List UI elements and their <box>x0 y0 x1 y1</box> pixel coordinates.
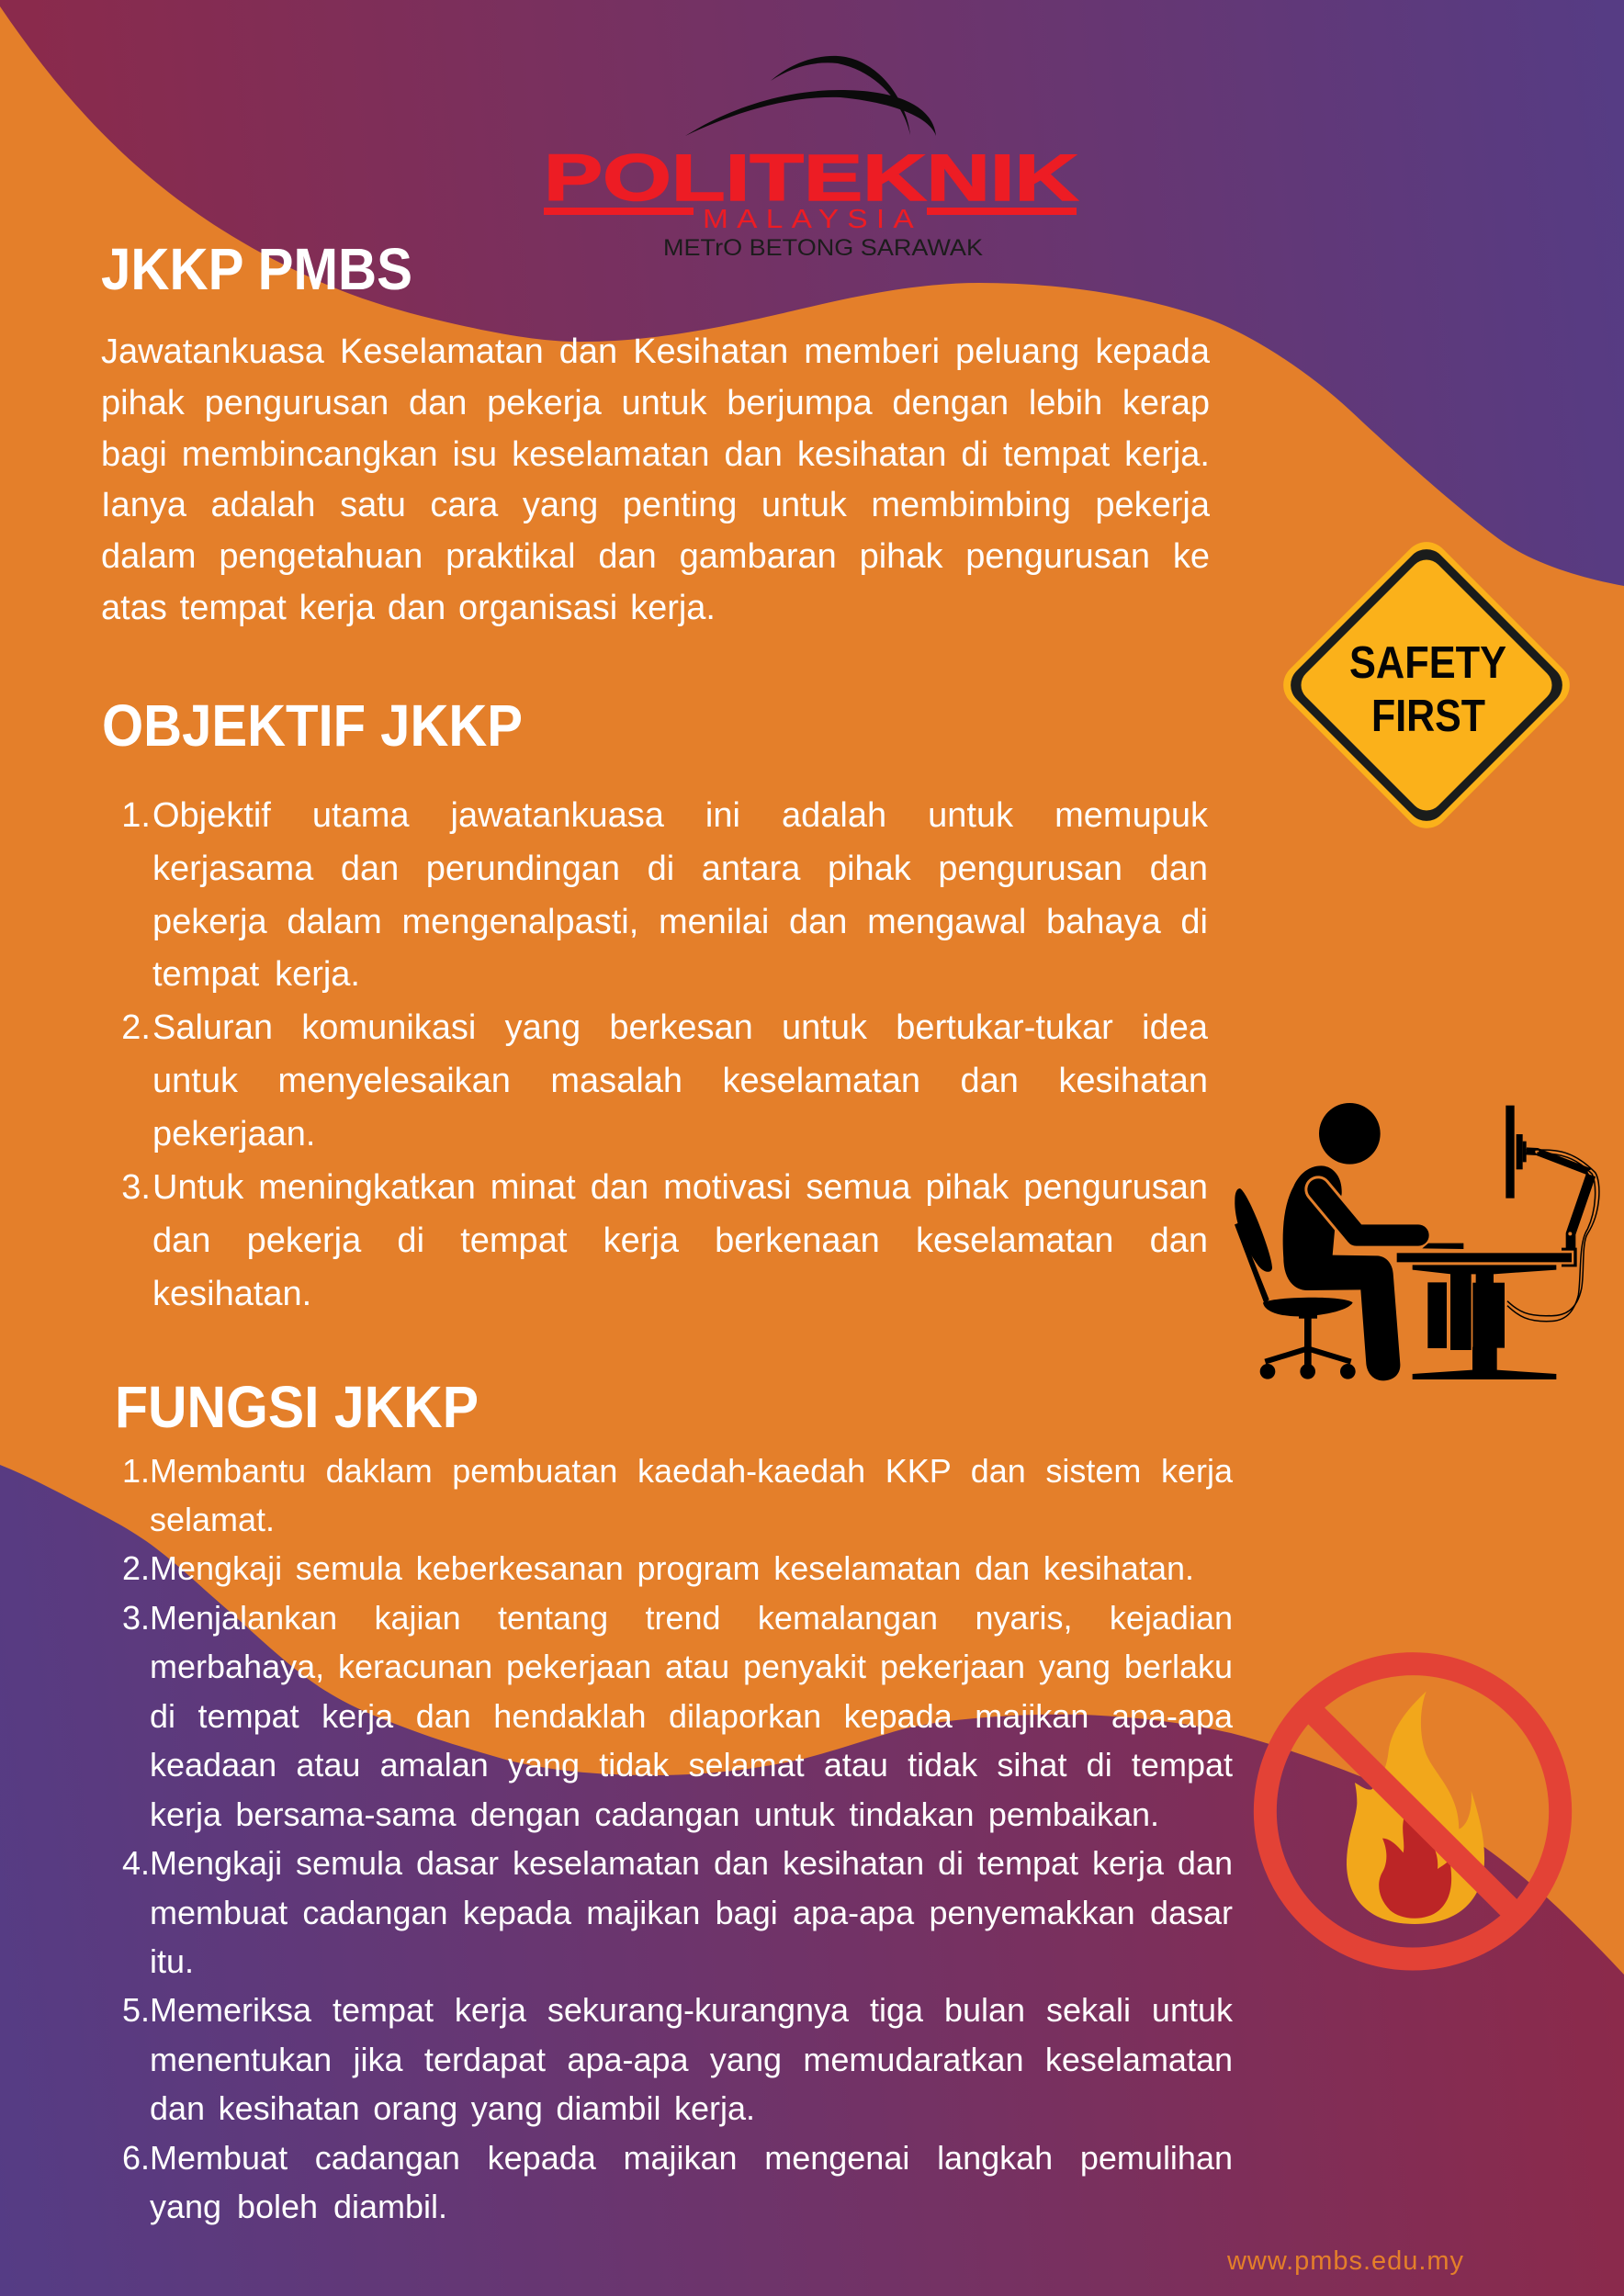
fungsi item 5: menentukan jika terdapat apa-apa yang memudaratkan keselamatan <box>150 2041 1233 2078</box>
objektif item 1: Objektif utama jawatankuasa ini adalah untuk memupuk <box>152 796 1208 835</box>
heading: OBJEKTIF JKKP: OBJEKTIF JKKP <box>102 692 523 759</box>
fungsi item 3: di tempat kerja dan hendaklah dilaporkan kepada majikan apa-apa <box>150 1697 1233 1735</box>
objektif item 3: dan pekerja di tempat kerja berkenaan keselamatan dan <box>152 1221 1208 1260</box>
fungsi item 4: 4. <box>122 1844 150 1882</box>
fungsi item 3: 3. <box>122 1599 150 1637</box>
fungsi item 2: Mengkaji semula keberkesanan program keselamatan dan kesihatan. <box>150 1549 1194 1587</box>
fungsi item 4: Mengkaji semula dasar keselamatan dan kesihatan di tempat kerja dan <box>150 1844 1233 1882</box>
fungsi item 4: membuat cadangan kepada majikan bagi apa-apa penyemakkan dasar <box>150 1894 1233 1931</box>
objektif item 3: kesihatan. <box>152 1275 311 1313</box>
text block: JKKP PMBS introduction: atas tempat kerja dan organisasi kerja. <box>101 589 716 627</box>
fungsi item 4 <box>122 1844 1233 1980</box>
fungsi item 3: kerja bersama-sama dengan cadangan untuk tindakan pembaikan. <box>150 1795 1159 1833</box>
text block: JKKP PMBS introduction: pihak pengurusan dan pekerja untuk berjumpa dengan lebih kerap <box>101 384 1210 422</box>
fungsi item 3: Menjalankan kajian tentang trend kemalangan nyaris, kejadian <box>150 1599 1233 1637</box>
text block: JKKP PMBS introduction: bagi membincangkan isu keselamatan dan kesihatan di tempat kerja. <box>101 435 1210 474</box>
fungsi item 1: Membantu daklam pembuatan kaedah-kaedah KKP dan sistem kerja <box>150 1451 1233 1490</box>
objektif item 2: untuk menyelesaikan masalah keselamatan dan kesihatan <box>152 1062 1208 1100</box>
fungsi item 6 <box>122 2139 1233 2225</box>
fungsi item 6: Membuat cadangan kepada majikan mengenai langkah pemulihan <box>150 2139 1233 2177</box>
text block: JKKP PMBS introduction <box>101 332 1210 627</box>
text block: JKKP PMBS introduction: Jawatankuasa Keselamatan dan Kesihatan memberi peluang kepada <box>101 332 1210 371</box>
fungsi item 1: 1. <box>122 1451 150 1490</box>
website footer text: www.pmbs.edu.my <box>1226 2246 1464 2276</box>
fungsi item 5: dan kesihatan orang yang diambil kerja. <box>150 2089 755 2127</box>
objektif item 2: Saluran komunikasi yang berkesan untuk bertukar-tukar idea <box>152 1008 1208 1047</box>
icon: safety first diamond sign <box>1283 542 1570 828</box>
objektif item 1: pekerja dalam mengenalpasti, menilai dan mengawal bahaya di <box>152 903 1208 941</box>
objektif item 1 <box>121 796 1208 994</box>
fungsi item 5: Memeriksa tempat kerja sekurang-kurangnya tiga bulan sekali untuk <box>150 1991 1233 2029</box>
logo: Politeknik Malaysia Metro Betong Sarawak: METrO BETONG SARAWAK <box>663 235 983 261</box>
numbered list: fungsi <box>122 1451 1233 2225</box>
icon: safety first diamond sign: SAFETY <box>1349 638 1506 688</box>
fungsi item 6: yang boleh diambil. <box>150 2188 447 2225</box>
fungsi item 5 <box>122 1991 1233 2127</box>
text block: JKKP PMBS introduction: dalam pengetahuan praktikal dan gambaran pihak pengurusan ke <box>101 537 1210 576</box>
fungsi item 3 <box>122 1599 1233 1833</box>
heading: FUNGSI JKKP: FUNGSI JKKP <box>115 1374 479 1440</box>
fungsi item 3: merbahaya, keracunan pekerjaan atau penyakit pekerjaan yang berlaku <box>150 1648 1233 1685</box>
fungsi item 1: selamat. <box>150 1501 275 1538</box>
objektif item 3: Untuk meningkatkan minat dan motivasi semua pihak pengurusan <box>152 1168 1208 1207</box>
objektif item 2 <box>121 1008 1208 1154</box>
objektif item 2: 2. <box>121 1008 151 1047</box>
objektif item 1: kerjasama dan perundingan di antara pihak pengurusan dan <box>152 850 1208 888</box>
objektif item 1: tempat kerja. <box>152 955 360 994</box>
icon: no fire prohibition sign <box>1253 1652 1573 1971</box>
fungsi item 1 <box>122 1451 1233 1538</box>
fungsi item 3: keadaan atau amalan yang tidak selamat atau tidak sihat di tempat <box>150 1746 1233 1784</box>
objektif item 3 <box>121 1168 1208 1313</box>
logo: Politeknik Malaysia Metro Betong Sarawak: POLITEKNIK <box>544 142 1078 215</box>
fungsi item 2: 2. <box>122 1549 150 1587</box>
heading: JKKP PMBS: JKKP PMBS <box>101 236 412 302</box>
fungsi item 5: 5. <box>122 1991 150 2029</box>
objektif item 1: 1. <box>121 796 151 835</box>
fungsi item 6: 6. <box>122 2139 150 2177</box>
objektif item 2: pekerjaan. <box>152 1115 315 1154</box>
fungsi item 4: itu. <box>150 1942 194 1980</box>
logo: Politeknik Malaysia Metro Betong Sarawak: MALAYSIA <box>703 205 922 234</box>
numbered list: objektif <box>121 796 1208 1313</box>
icon: worker seated at ergonomic desk <box>1235 1103 1600 1381</box>
text block: JKKP PMBS introduction: Ianya adalah satu cara yang penting untuk membimbing pekerja <box>101 486 1210 524</box>
icon: safety first diamond sign: FIRST <box>1371 692 1485 741</box>
objektif item 3: 3. <box>121 1168 151 1207</box>
logo: Politeknik Malaysia Metro Betong Sarawak <box>544 55 1080 261</box>
